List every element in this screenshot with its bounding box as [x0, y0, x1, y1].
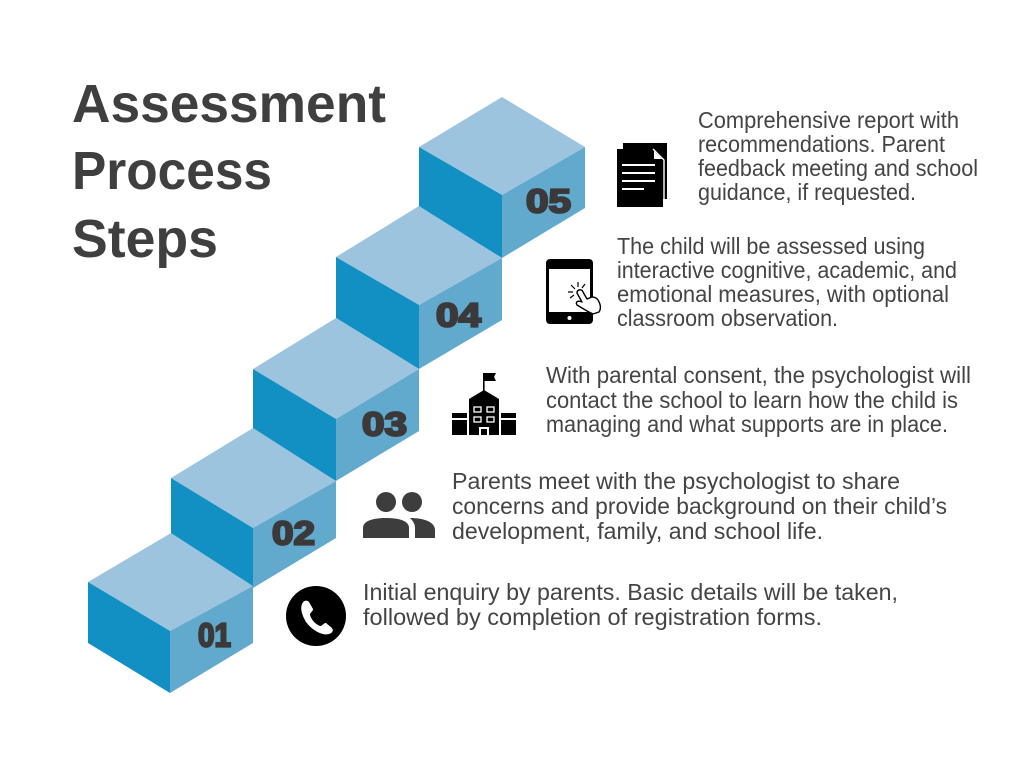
title: Assessment — [72, 74, 386, 134]
text: step 2 description: development, family, and school life. — [452, 518, 823, 544]
text: step 5 description: recommendations. Parent — [698, 131, 946, 157]
text: step 2 description: Parents meet with the psychologist to share — [452, 468, 900, 494]
step 5 block: 05 — [526, 182, 571, 220]
text: step 4 description: The child will be assessed using — [617, 233, 925, 259]
icon: phone — [286, 586, 346, 646]
step 1 block — [88, 533, 253, 693]
step 3 block — [253, 318, 419, 481]
step 3 block: 03 — [362, 406, 407, 442]
text: step 5 description: guidance, if requested. — [698, 179, 916, 205]
text: step 2 description — [452, 468, 947, 544]
text: step 3 description — [546, 362, 971, 437]
text: step 5 description: Comprehensive report with — [698, 107, 959, 133]
step 4 block: 04 — [436, 296, 482, 334]
text: step 1 description: followed by completion of registration forms. — [363, 604, 822, 630]
icon: school building — [452, 373, 516, 435]
step 1 block: 01 — [198, 616, 231, 654]
text: step 3 description: With parental consent, the psychologist will — [546, 362, 971, 388]
text: step 2 description: concerns and provide background on their child’s — [452, 493, 947, 519]
step 5 block — [419, 97, 585, 258]
text: step 3 description: contact the school to learn how the child is — [546, 387, 958, 413]
title: Process — [72, 141, 272, 201]
step 4 block — [336, 206, 502, 369]
text: step 4 description: emotional measures, with optional — [617, 281, 949, 307]
title — [72, 74, 386, 269]
text: step 1 description: Initial enquiry by parents. Basic details will be taken, — [363, 579, 898, 605]
text: step 5 description: feedback meeting and school — [698, 155, 978, 181]
icon: two people — [363, 492, 435, 538]
icon: tablet with tap — [546, 259, 600, 324]
step 2 block: 02 — [272, 514, 315, 552]
text: step 1 description — [363, 579, 898, 630]
text: step 4 description: classroom observation. — [617, 305, 838, 331]
text: step 5 description — [698, 107, 978, 205]
icon: documents — [617, 143, 667, 207]
text: step 4 description: interactive cognitive, academic, and — [617, 257, 957, 283]
step 2 block — [171, 428, 336, 588]
text: step 4 description — [617, 233, 957, 331]
text: step 3 description: managing and what supports are in place. — [546, 411, 948, 437]
title: Steps — [72, 209, 218, 269]
